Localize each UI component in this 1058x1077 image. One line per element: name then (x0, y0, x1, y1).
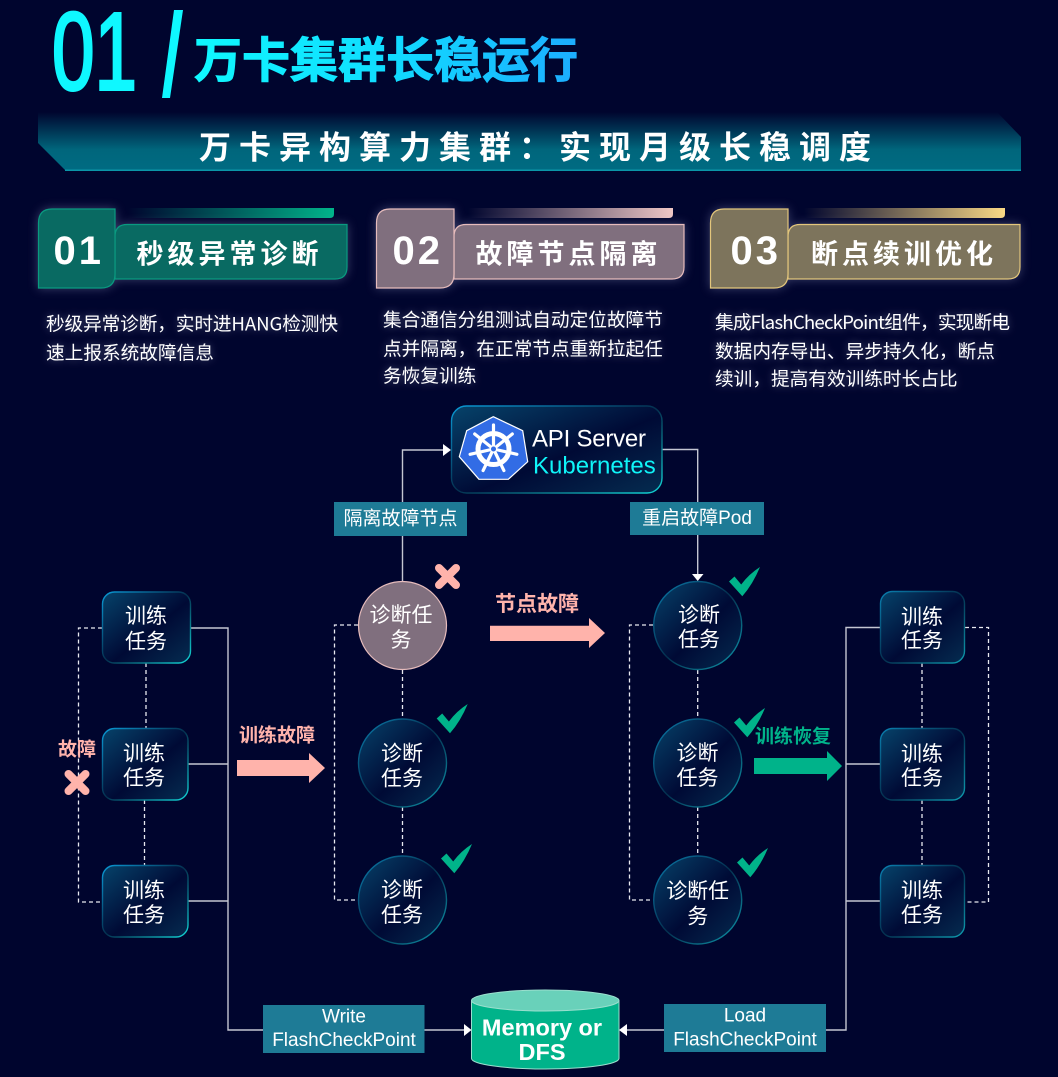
node 3: 诊断任 (666, 875, 729, 905)
title heading: 万卡集群长稳运行 (194, 21, 578, 91)
arrow: 节点故障 (490, 588, 605, 648)
heading bar 03: 断点续训优化 (811, 232, 997, 272)
description 01: 速上报系统故障信息 (46, 338, 214, 366)
diagnosis column 1 (358, 568, 472, 944)
node 1: 诊断 (678, 599, 720, 629)
task box 3: 训练 (123, 874, 165, 904)
label: 重启故障Pod: 重启故障Pod (642, 507, 752, 529)
arrow: 训练故障 (237, 720, 325, 783)
task box 3: 任务 (901, 899, 943, 929)
label: Load FlashCheckPoint: FlashCheckPoint (673, 1030, 818, 1050)
description 03 (715, 308, 1010, 392)
panel: 03 断点续训优化 (710, 208, 1020, 392)
description 02: 集合通信分组测试自动定位故障节 (383, 306, 663, 332)
label: 隔离故障节点: 隔离故障节点 (343, 508, 458, 530)
heading bar 03 (710, 209, 1020, 288)
Kubernetes text: Kubernetes (533, 452, 656, 480)
task box 1 (102, 592, 190, 663)
task box 2: 训练 (901, 738, 943, 768)
title slash (162, 10, 183, 98)
description 03: 数据内存导出、异步持久化，断点 (715, 337, 995, 364)
accent bar 01 (128, 208, 334, 218)
description 03: 集成FlashCheckPoint组件，实现断电 (715, 308, 1010, 335)
node 3: 务 (687, 900, 708, 930)
task box 1: 训练 (901, 601, 943, 631)
node 2 (358, 719, 446, 807)
description 01: 秒级异常诊断，实时进HANG检测快 (46, 310, 338, 336)
diagnosis column 2 (654, 567, 768, 944)
node 3 (654, 856, 742, 944)
description 02: 点并隔离，在正常节点重新拉起任 (383, 334, 663, 362)
task box 2: 训练 (123, 738, 165, 768)
label: Write FlashCheckPoint: Write (322, 1006, 366, 1028)
connector lines (78, 450, 988, 1030)
heading bar 03: 03 (730, 229, 781, 273)
arrow: 训练恢复: 训练恢复 (755, 722, 831, 748)
node 3: 诊断 (381, 874, 423, 904)
icon: check (729, 567, 760, 596)
task box 2: 任务 (123, 762, 165, 792)
failed node (358, 582, 446, 670)
fault marker (58, 734, 96, 791)
task box 2: 任务 (901, 762, 943, 792)
left training tasks (102, 592, 190, 937)
node 2: 诊断 (381, 738, 423, 768)
arrow: 训练恢复 (754, 722, 842, 781)
node 1: 任务 (678, 624, 720, 654)
failed node: 诊断任 (370, 599, 432, 629)
node 2 (654, 719, 742, 807)
API Server text: API Server (532, 426, 646, 452)
node 2: 任务 (381, 762, 423, 792)
task box 3 (880, 866, 964, 937)
title: 01 万卡集群长稳运行 (52, 0, 578, 114)
panel: 02 故障节点隔离 (376, 208, 684, 388)
heading bar 01: 秒级异常诊断 (136, 232, 322, 272)
task box 1: 训练 (125, 600, 167, 630)
task box 2 (102, 728, 188, 800)
description 02: 务恢复训练 (383, 362, 476, 388)
cylinder: Memory or DFS: DFS (518, 1039, 566, 1065)
right training tasks (880, 592, 964, 937)
icon: cross (68, 774, 86, 791)
label: Load FlashCheckPoint (664, 1004, 826, 1052)
fault marker: 故障 (58, 734, 96, 762)
banner (38, 112, 1021, 170)
node 1 (654, 582, 742, 670)
task box 3 (102, 866, 188, 937)
heading bar 01: 01 (54, 229, 104, 273)
task box 1 (880, 592, 964, 663)
icon: check (734, 708, 765, 737)
icon: kubernetes wheel (459, 417, 528, 479)
icon: check (441, 844, 472, 873)
banner heading: 万卡异构算力集群：实现月级长稳调度 (199, 122, 879, 168)
heading bar 01 (38, 209, 347, 288)
node 3 (358, 856, 446, 944)
icon: check (437, 704, 468, 733)
API Server panel (452, 406, 662, 493)
arrowheads (443, 444, 704, 1036)
accent bar 03 (804, 208, 1005, 218)
panel: 01 秒级异常诊断 (38, 208, 347, 366)
task box 2 (880, 728, 964, 800)
task box 3: 训练 (901, 874, 943, 904)
description 01 (46, 310, 338, 366)
task box 1: 任务 (901, 624, 943, 654)
label: 重启故障Pod (630, 502, 764, 535)
cylinder: Memory or DFS (472, 990, 619, 1069)
label: Load FlashCheckPoint: Load (724, 1006, 766, 1026)
heading bar 02: 02 (392, 229, 443, 273)
label: 隔离故障节点 (334, 502, 467, 536)
task box 3: 任务 (123, 899, 165, 929)
description 03: 续训，提高有效训练时长占比 (715, 364, 958, 392)
accent bar 02 (468, 208, 673, 218)
label: Write FlashCheckPoint: FlashCheckPoint (272, 1030, 417, 1051)
task box 1: 任务 (125, 626, 167, 656)
cylinder: Memory or DFS: Memory or (482, 1014, 602, 1040)
node 2: 任务 (676, 762, 718, 792)
icon: cross (439, 568, 456, 585)
node 3: 任务 (381, 899, 423, 929)
arrow: 训练故障: 训练故障 (239, 720, 315, 748)
heading bar 02 (376, 209, 684, 288)
description 02 (383, 306, 663, 388)
node 2: 诊断 (676, 737, 718, 767)
heading bar 02: 故障节点隔离 (476, 232, 662, 272)
arrow: 节点故障: 节点故障 (495, 588, 579, 618)
label: Write FlashCheckPoint (263, 1005, 424, 1053)
icon: check (737, 848, 768, 877)
failed node: 务 (390, 624, 412, 654)
